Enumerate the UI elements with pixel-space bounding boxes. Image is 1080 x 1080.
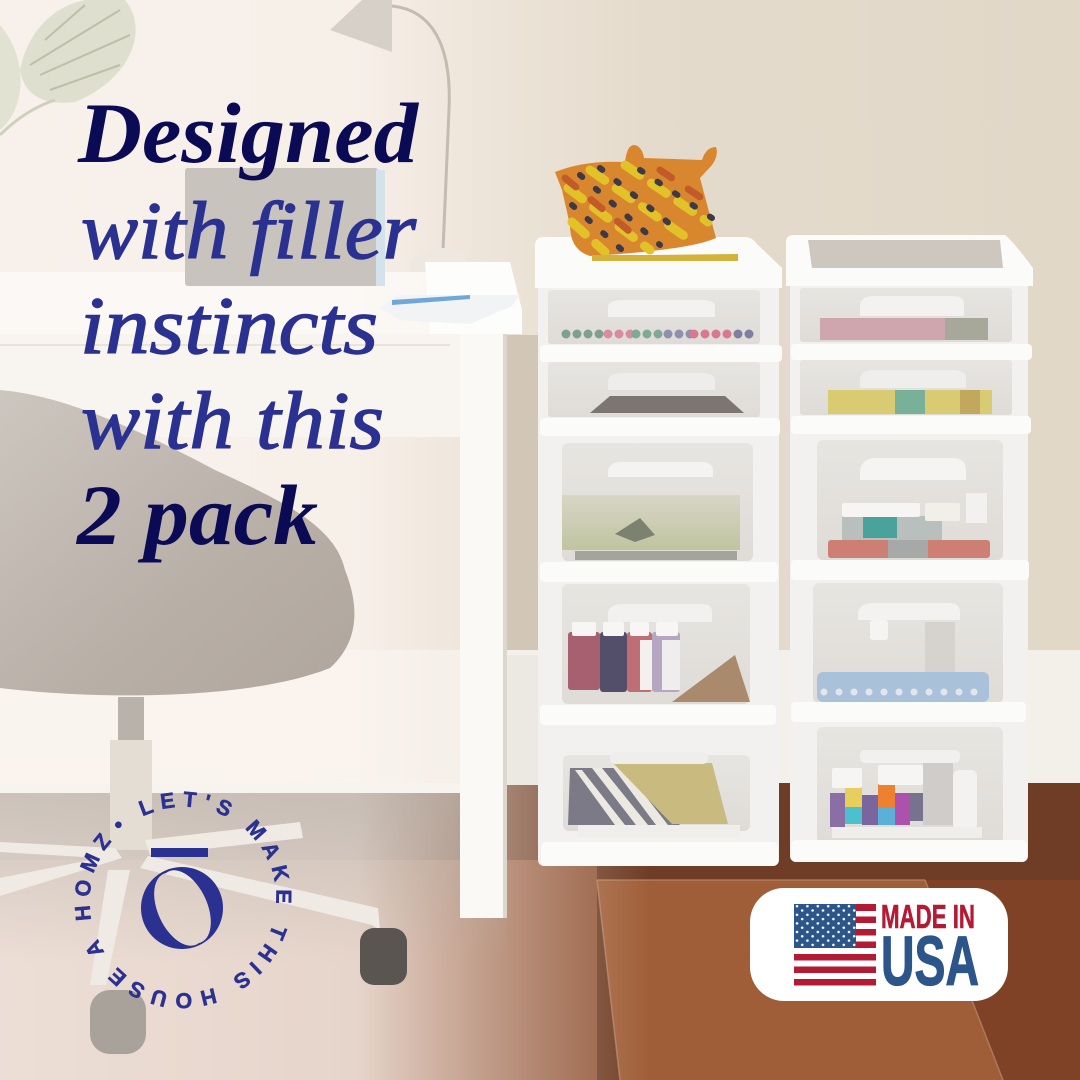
drawer 1 handle <box>608 300 715 317</box>
grey floor shade <box>0 793 507 963</box>
drawer 1 pens <box>566 330 756 338</box>
logo letter o <box>141 867 223 949</box>
baseboard <box>0 650 1080 785</box>
drawer 1 contents <box>820 296 988 340</box>
american flag <box>794 904 876 986</box>
usa text: USA <box>881 922 979 1000</box>
headline line 4: with this <box>81 375 384 466</box>
frame strips <box>791 344 1032 862</box>
white fade overlay <box>0 0 650 1080</box>
drawer 2 contents <box>590 373 744 413</box>
drawer 4 blue beads <box>817 603 989 702</box>
badge background <box>750 888 1008 1001</box>
baseboard sliver beside desk <box>507 655 541 785</box>
drawer 2 contents <box>828 370 992 414</box>
drawer 3 bottles and beads <box>828 458 990 558</box>
headline <box>75 85 420 563</box>
drawer 3 contents <box>562 462 740 560</box>
tower frame <box>538 270 779 866</box>
made in text: MADE IN <box>881 898 975 935</box>
colorful pouch <box>555 145 738 261</box>
drawer windows <box>800 288 1012 843</box>
made in USA badge <box>750 888 1008 1001</box>
storage tower: right <box>786 235 1033 862</box>
headline line 1: Designed <box>77 85 420 181</box>
wall sliver beside desk <box>507 335 541 650</box>
drawer 4 paint bottles <box>568 604 750 702</box>
desk lamp <box>330 0 468 273</box>
drawer 5 small bottles <box>830 750 982 838</box>
left baseboard extension <box>0 783 507 793</box>
logo macron bar <box>151 848 208 857</box>
drawer 5 notebooks <box>568 752 740 837</box>
drawer windows <box>548 290 760 831</box>
brand seal <box>74 791 292 1008</box>
storage tower: left <box>535 145 782 866</box>
floor <box>0 783 1080 1080</box>
top lid <box>786 235 1033 286</box>
tower frame <box>790 270 1028 862</box>
headline line 5: 2 pack <box>75 467 318 563</box>
headline line 3: instincts <box>80 280 378 371</box>
circular slogan: • LET'S MAKE THIS HOUSE A HOMZ <box>74 791 292 1008</box>
headline line 2: with filler <box>81 185 417 276</box>
office chair <box>0 390 407 1054</box>
laptop <box>185 168 385 286</box>
top lid <box>535 237 782 288</box>
plant <box>0 0 136 135</box>
frame strips <box>540 345 782 866</box>
desk <box>0 262 522 918</box>
